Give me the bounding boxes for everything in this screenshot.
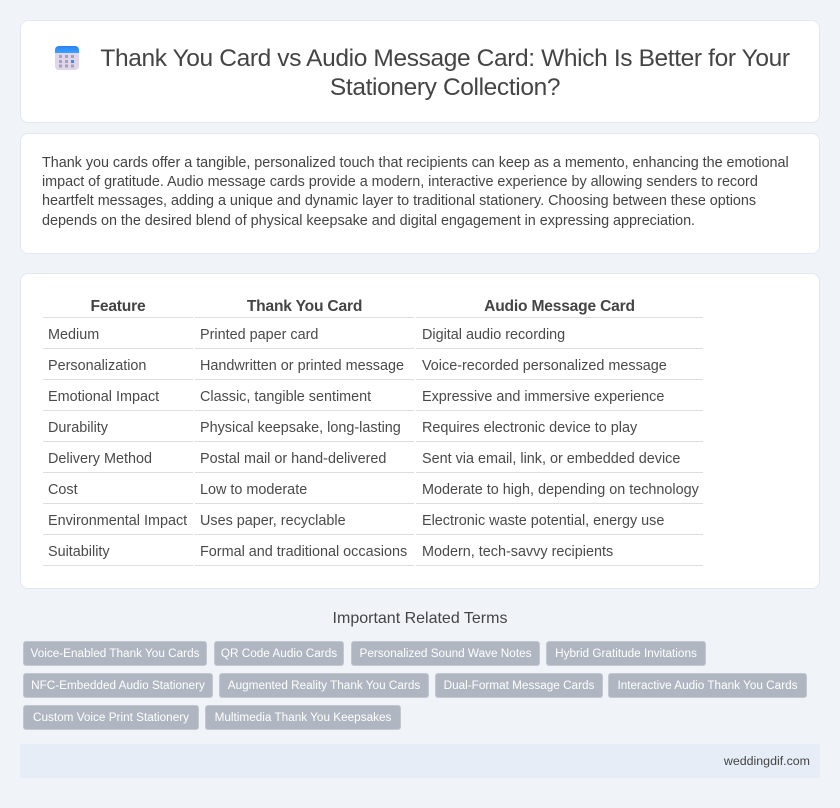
comparison table: Modern, tech-savvy recipients — [422, 544, 613, 560]
intro text: depends on the desired blend of physical keepsake and digital engagement in expressing appreciation. — [42, 213, 695, 229]
comparison table: Requires electronic device to play — [422, 420, 637, 436]
comparison table: Feature — [91, 298, 145, 315]
table panel — [20, 273, 820, 589]
comparison table: Personalization — [48, 358, 146, 374]
comparison table: Low to moderate — [200, 482, 307, 498]
intro text — [42, 155, 789, 229]
footer site name: weddingdif.com — [724, 754, 810, 768]
title: Stationery Collection? — [330, 74, 560, 101]
intro text: heartfelt messages, adding a unique and dynamic layer to traditional stationery. Choosing between these options — [42, 193, 756, 209]
comparison table: Physical keepsake, long-lasting — [200, 420, 401, 436]
comparison table: Voice-recorded personalized message — [422, 358, 667, 374]
related term tags: Personalized Sound Wave Notes — [360, 647, 532, 660]
icon: calendar — [55, 46, 79, 70]
comparison table: Audio Message Card — [484, 298, 635, 315]
related term tags: Dual-Format Message Cards — [444, 679, 594, 692]
related term tags: QR Code Audio Cards — [221, 647, 337, 660]
related term tags — [23, 641, 807, 730]
comparison table: Environmental Impact — [48, 512, 187, 528]
title: Thank You Card vs Audio Message Card: Which Is Better for Your — [100, 45, 790, 72]
related term tags: Hybrid Gratitude Invitations — [555, 647, 697, 660]
related term tags: Augmented Reality Thank You Cards — [228, 679, 420, 692]
related term tags: Voice-Enabled Thank You Cards — [30, 647, 199, 660]
comparison table: Medium — [48, 326, 99, 342]
comparison table: Delivery Method — [48, 450, 152, 466]
comparison table: Expressive and immersive experience — [422, 388, 664, 404]
comparison table: Cost — [48, 482, 78, 498]
comparison table: Handwritten or printed message — [200, 358, 404, 374]
comparison table: Printed paper card — [200, 326, 318, 342]
comparison table: Postal mail or hand-delivered — [200, 450, 386, 466]
title — [100, 45, 790, 101]
comparison table: Classic, tangible sentiment — [200, 388, 371, 404]
intro text: impact of gratitude. Audio message cards provide a modern, interactive experience by allowing senders to record — [42, 174, 758, 190]
comparison table: Durability — [48, 420, 108, 436]
intro panel — [20, 133, 820, 254]
related term tags: Multimedia Thank You Keepsakes — [215, 711, 391, 724]
footer bar — [20, 744, 820, 778]
comparison table: Moderate to high, depending on technology — [422, 482, 699, 498]
comparison table: Emotional Impact — [48, 388, 159, 404]
related term tags: Interactive Audio Thank You Cards — [617, 679, 798, 692]
comparison table: Uses paper, recyclable — [200, 512, 346, 528]
comparison table: Suitability — [48, 544, 110, 560]
related term tags: NFC-Embedded Audio Stationery — [31, 679, 205, 692]
related terms heading: Important Related Terms — [333, 610, 507, 627]
comparison table: Electronic waste potential, energy use — [422, 512, 664, 528]
comparison table: Digital audio recording — [422, 326, 565, 342]
comparison table: Thank You Card — [247, 298, 362, 315]
comparison table: Sent via email, link, or embedded device — [422, 450, 680, 466]
intro text: Thank you cards offer a tangible, personalized touch that recipients can keep as a memento, enhancing the emotional — [42, 155, 789, 171]
comparison table — [43, 298, 703, 566]
comparison table: Formal and traditional occasions — [200, 544, 407, 560]
related term tags: Custom Voice Print Stationery — [33, 711, 189, 724]
title panel — [20, 20, 820, 123]
